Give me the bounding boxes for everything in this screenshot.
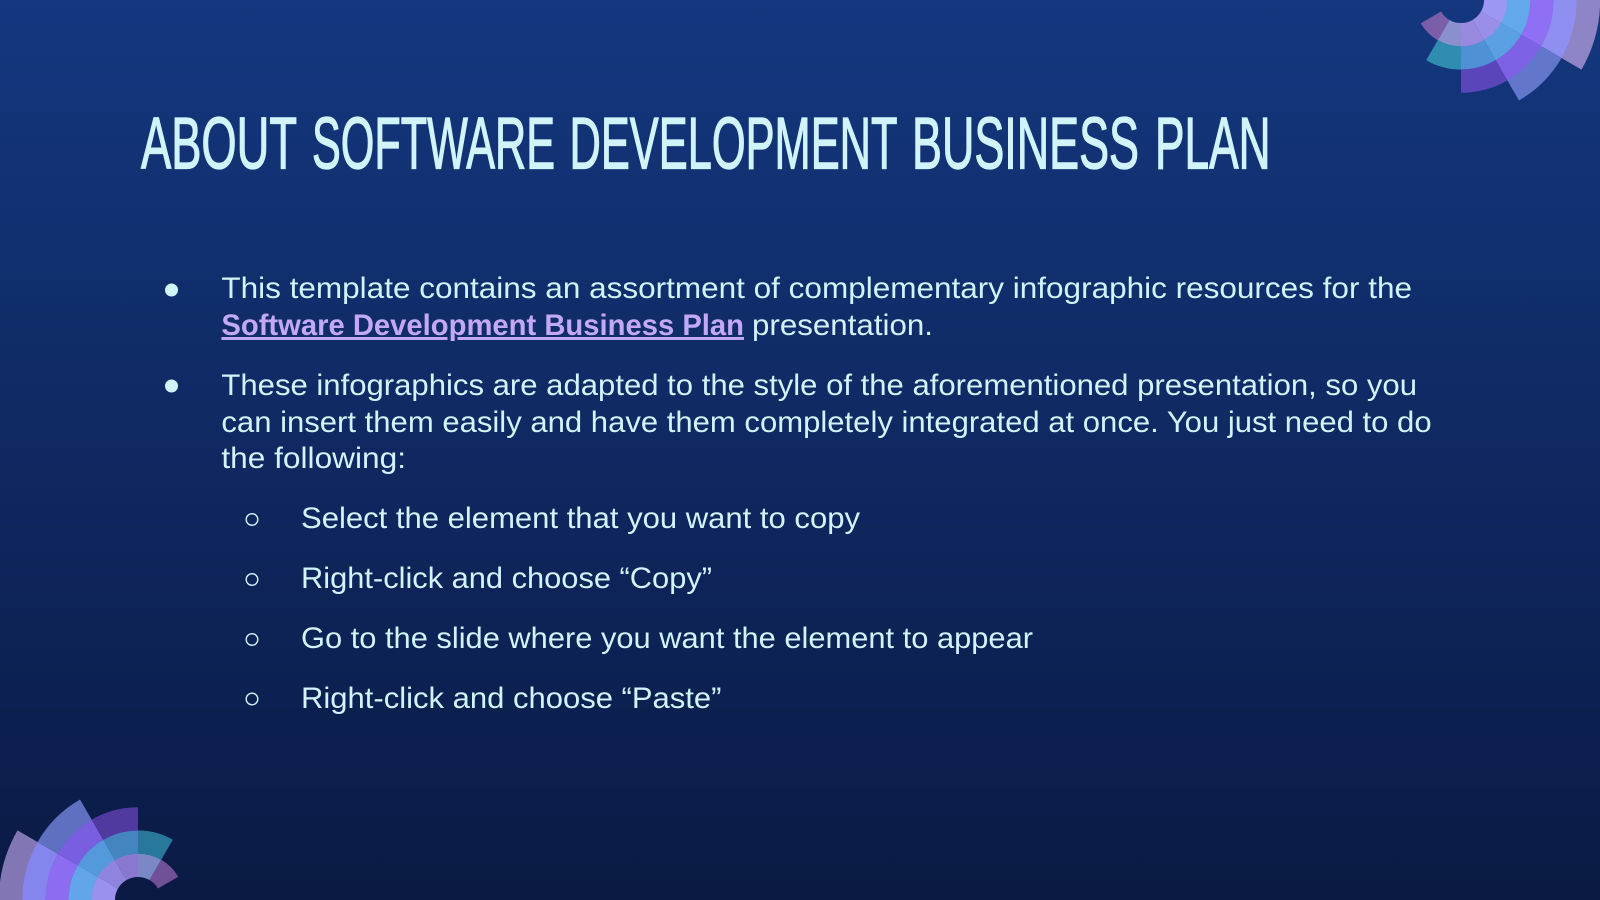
title: DEVELOPMENT: [570, 102, 898, 184]
text block: sub-bullet select: Select the element that you want to copy: [301, 502, 860, 535]
text block: second bullet: can insert them easily and have them completely integrated at once. You just need to do: [221, 406, 1432, 439]
icon: fan decoration top right: [1431, 0, 1588, 90]
title: SOFTWARE: [312, 102, 555, 184]
text block: second bullet: These infographics are adapted to the style of the aforementioned presentation, so you: [221, 369, 1417, 402]
text block: first bullet: Software Development Business Plan: [221, 309, 744, 342]
text block: sub-bullet paste: Right-click and choose “Paste”: [301, 682, 722, 715]
text block: second bullet: the following:: [221, 442, 406, 475]
text block: first bullet: [165, 272, 1412, 342]
icon: fan decoration bottom left: [11, 810, 168, 900]
text block: sub-bullet go to slide: Go to the slide where you want the element to appear: [301, 622, 1033, 655]
title: [141, 102, 1270, 184]
text block: first bullet: This template contains an assortment of complementary infographic resources for the: [221, 272, 1412, 305]
title: ABOUT: [141, 102, 297, 184]
title: BUSINESS: [912, 102, 1139, 184]
title: PLAN: [1155, 102, 1270, 184]
text block: first bullet: presentation.: [752, 309, 933, 342]
text block: sub-bullet copy: Right-click and choose “Copy”: [301, 562, 712, 595]
text block: second bullet: [165, 369, 1432, 475]
